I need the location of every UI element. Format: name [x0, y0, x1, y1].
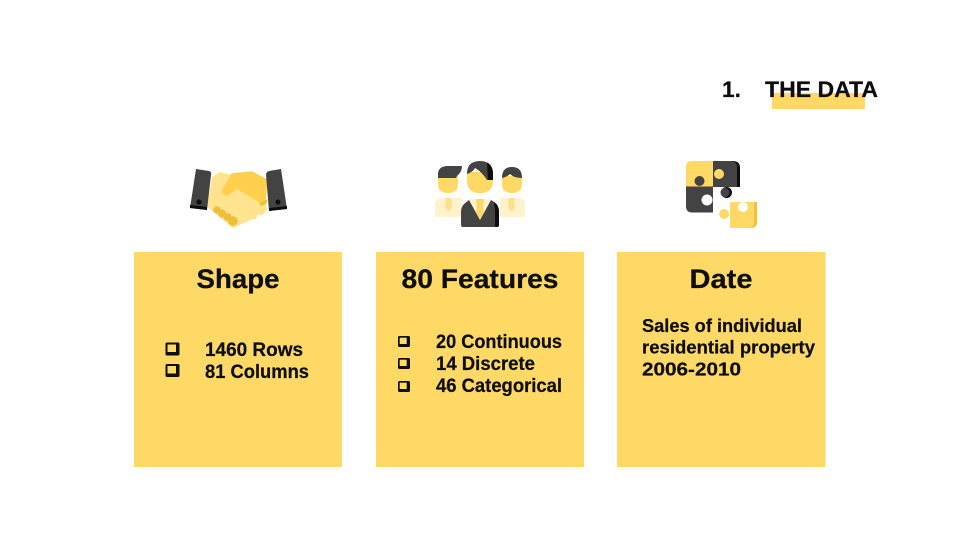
checkbox list: shape — [166, 340, 309, 383]
checkbox list: features: 20 Continuous — [436, 332, 562, 353]
panel: date — [617, 252, 826, 467]
checkbox list: features — [398, 332, 562, 397]
checkbox list: shape: 1460 Rows — [205, 340, 303, 361]
section heading — [722, 77, 878, 109]
icon: business team — [435, 161, 525, 227]
panel: shape — [134, 252, 342, 467]
checkbox list: shape: 81 Columns — [205, 362, 309, 383]
section heading: 1. — [722, 77, 741, 102]
text block: date description — [642, 315, 816, 380]
text block: date description: Sales of individual — [642, 315, 802, 336]
icon: puzzle pieces — [686, 161, 757, 228]
text block: date description: 2006-2010 — [642, 358, 741, 380]
panel heading: 80 Features: 80 Features — [402, 264, 558, 294]
panel heading: Shape: Shape — [196, 264, 280, 294]
text block: date description: residential property — [642, 336, 816, 358]
checkbox list: features: 46 Categorical — [436, 376, 562, 397]
icon: handshake — [190, 169, 287, 227]
panel: 80 features — [376, 252, 584, 467]
panel heading: Date: Date — [690, 264, 752, 294]
section heading: THE DATA — [765, 77, 878, 102]
checkbox list: features: 14 Discrete — [436, 354, 535, 375]
